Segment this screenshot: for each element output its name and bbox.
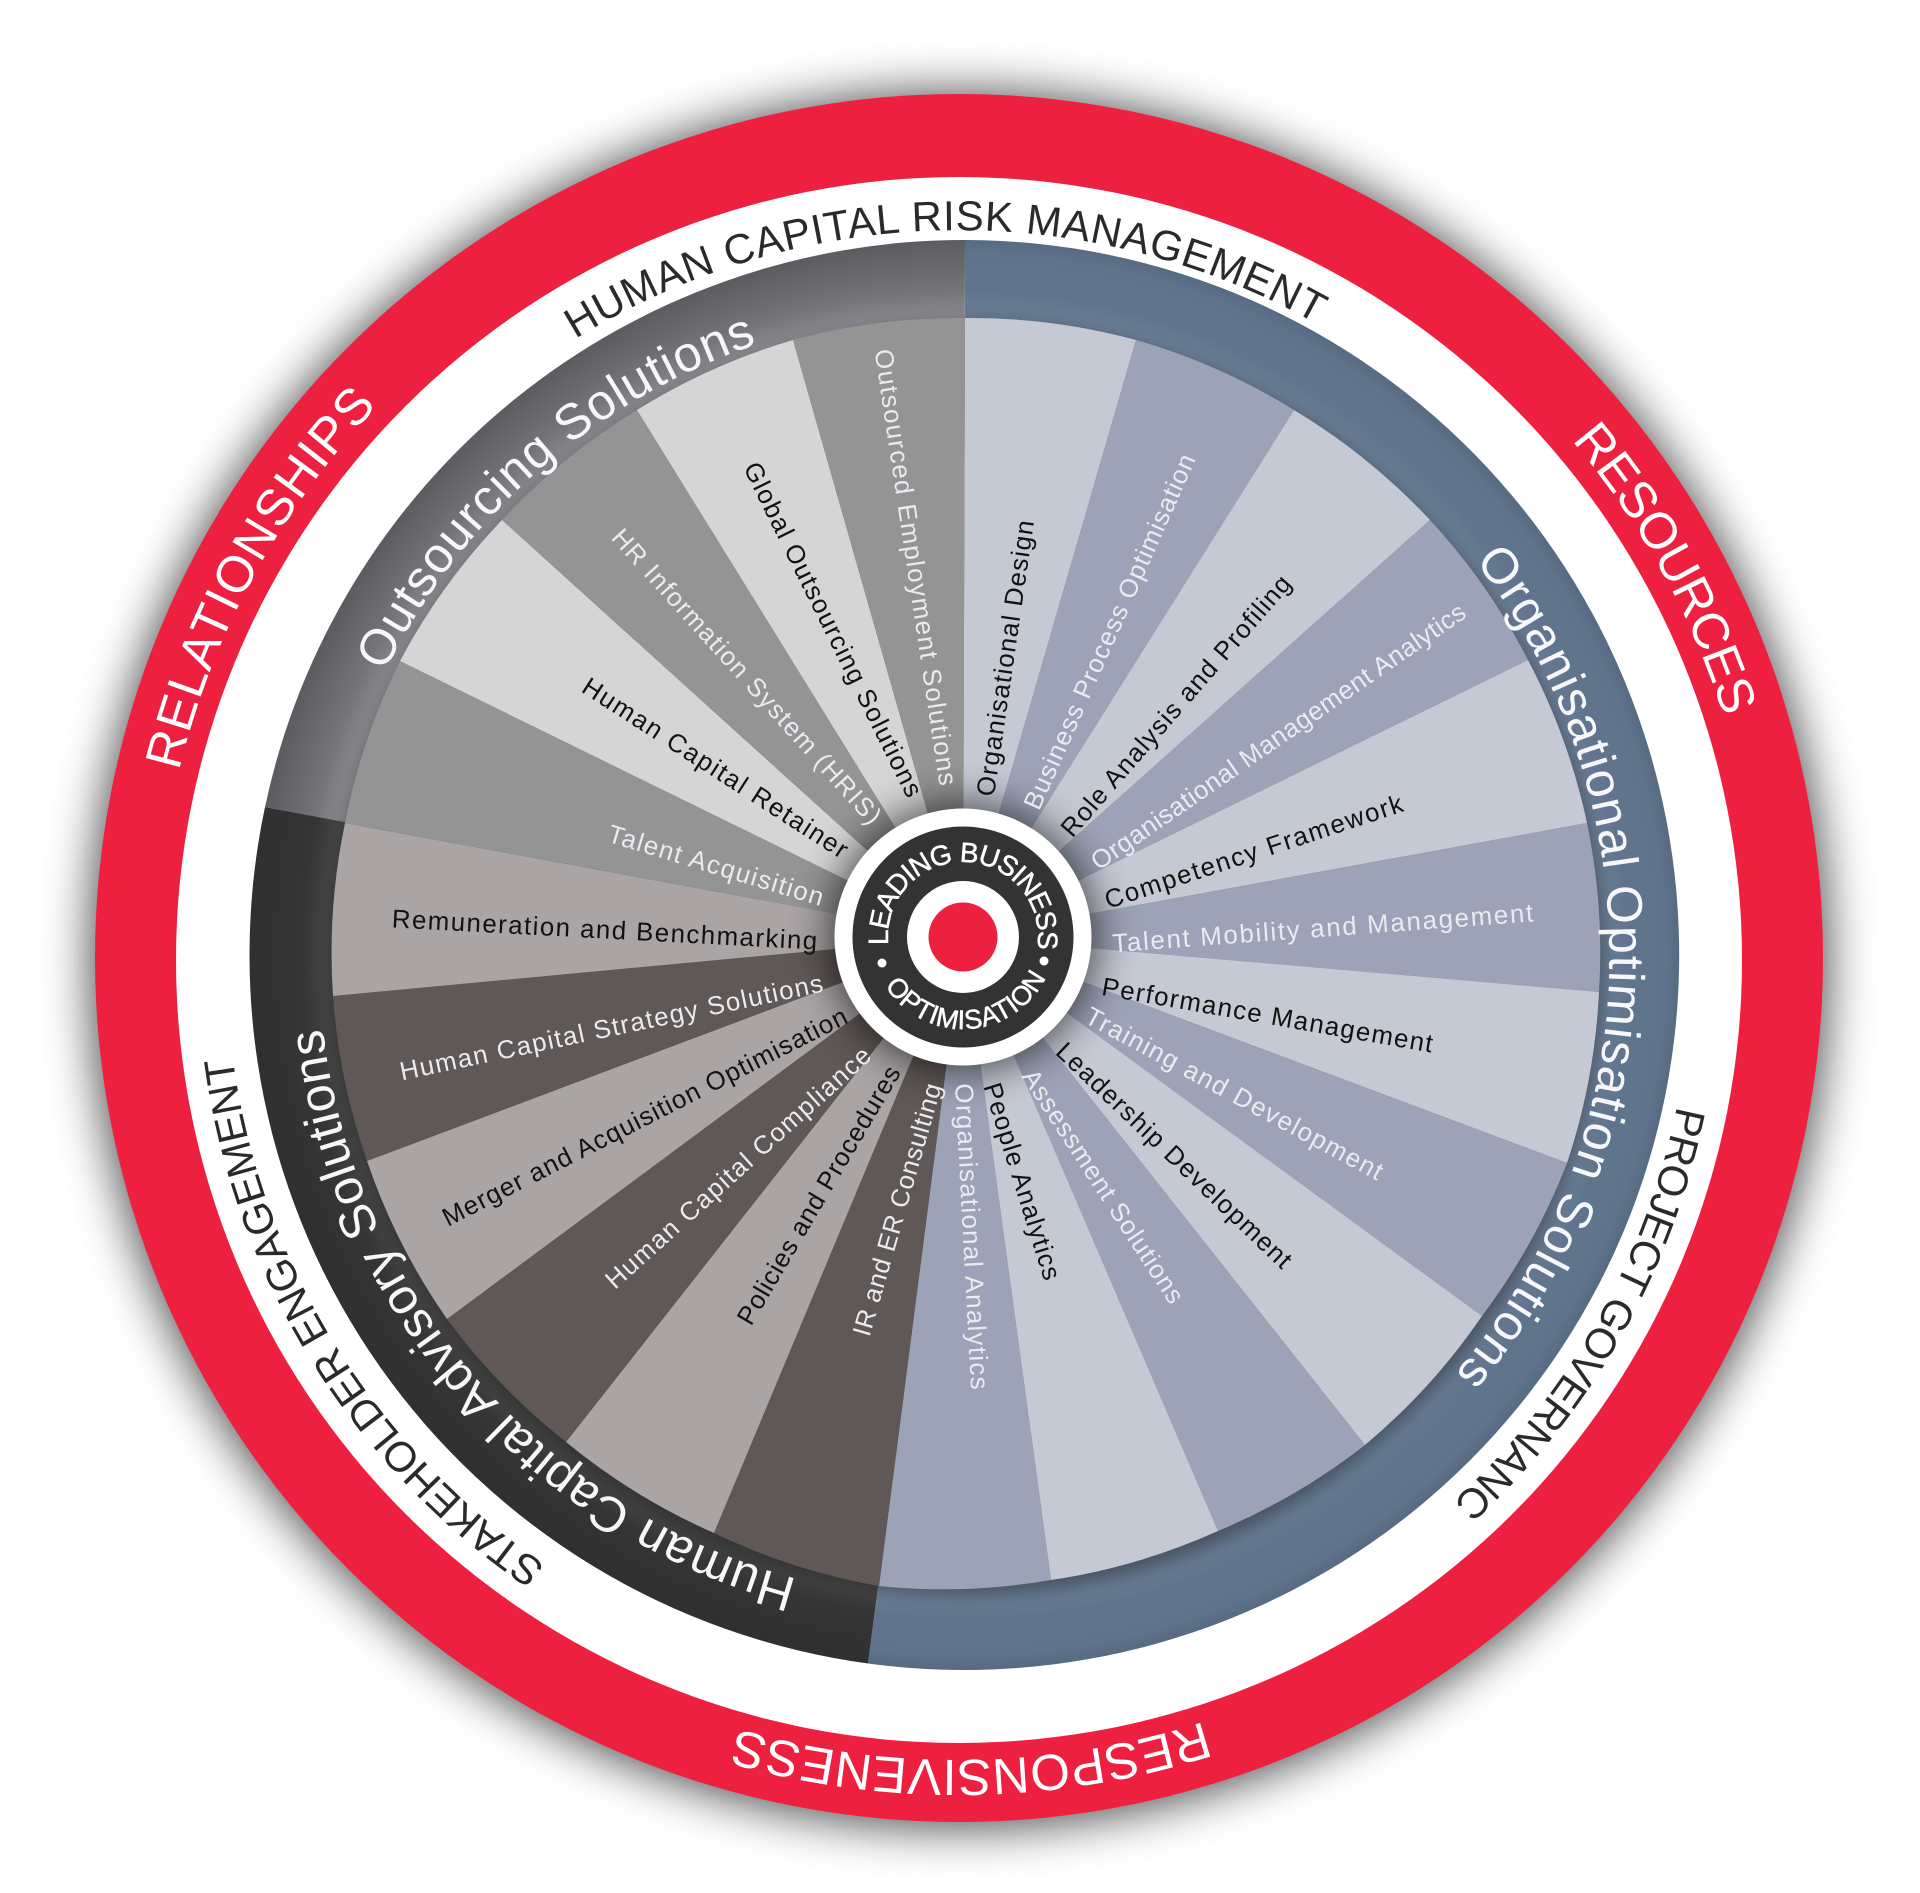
ring label: Human Capital Risk Management: HUMAN CAPITAL RISK MANAGEMENT [564,201,1330,338]
wedge: Organisational Design [963,318,1136,937]
label: Business Process Optimisation: Business Process Optimisation [1019,450,1201,814]
label: Talent Mobility and Management: Talent Mobility and Management [1111,899,1534,958]
ring label: Stakeholder Engagement: STAKEHOLDER ENGAGEMENT [204,1062,542,1584]
wedge: Talent Acquisition [345,661,963,937]
white ring [176,177,1742,1743]
wedge: Organisational Analytics [879,937,1051,1589]
hub text: Optimisation: OPTIMISATION [888,969,1046,1030]
label: Role Analysis and Profiling: Role Analysis and Profiling [1056,570,1297,843]
label: HR Information System (HRIS): HR Information System (HRIS) [606,524,887,830]
label: Merger and Acquisition Optimisation: Merger and Acquisition Optimisation [438,1003,852,1232]
hub text: Leading Business: LEADING BUSINESS [868,842,1058,948]
wedge: Global Outsourcing Solutions [637,340,963,937]
label: IR and ER Consulting: IR and ER Consulting [848,1080,948,1339]
wedge: Human Capital Retainer [400,520,963,937]
wedge: Human Capital Compliance [447,937,963,1442]
band: Organisational Optimisation Solutions [868,240,1679,1670]
wedge: Human Capital Strategy Solutions [333,937,963,1161]
label: Human Capital Retainer: Human Capital Retainer [577,673,853,865]
wedge: Outsourced Employment Solutions [793,318,965,937]
label: Global Outsourcing Solutions: Global Outsourcing Solutions [738,458,927,802]
wheel shadow on band [330,322,1602,1594]
ring label: Responsiveness: RESPONSIVENESS [732,1723,1210,1796]
wedge: Role Analysis and Profiling [963,410,1430,937]
wedge: Business Process Optimisation [963,340,1294,937]
wedge: Assessment Solutions [963,937,1365,1531]
wedge: Organisational Management Analytics [963,520,1528,937]
wheel wedges [332,318,1600,1589]
central hub [834,808,1092,1066]
ring label: Relationships: RELATIONSHIPS [146,388,372,767]
wedge: Remuneration and Benchmarking [332,823,963,996]
wedge: HR Information System [502,410,963,937]
band: Human Capital Advisory Solutions [250,807,963,1664]
label: Competency Framework: Competency Framework [1101,790,1407,915]
hub dot right [1040,956,1048,966]
band title: Outsourcing Solutions: Outsourcing Solutions [360,322,754,664]
wedge: Training and Development [963,937,1567,1316]
label: Assessment Solutions: Assessment Solutions [1016,1064,1189,1309]
label: People Analytics: People Analytics [978,1080,1066,1284]
wedge: Leadership Development [963,937,1482,1445]
wedge labels [391,347,1534,1390]
wedge: Policies and Procedures [566,937,963,1533]
wedge: Performance Management [963,937,1599,1163]
hub dot left [878,958,886,968]
label: Organisational Management Analytics: Organisational Management Analytics [1086,598,1471,876]
label: Organisational Analytics: Organisational Analytics [949,1083,993,1390]
ring label: Project Governance: PROJECT GOVERNANC [1458,1109,1705,1518]
label: Human Capital Compliance: Human Capital Compliance [600,1041,877,1295]
hub shadow [828,802,1098,1072]
ring label: Resources: RESOURCES [1574,421,1754,712]
label: Organisational Design: Organisational Design [972,518,1040,798]
label: Talent Acquisition: Talent Acquisition [605,820,827,912]
label: Training and Development: Training and Development [1080,1002,1388,1186]
label: Remuneration and Benchmarking: Remuneration and Benchmarking [391,905,818,956]
label: Human Capital Strategy Solutions: Human Capital Strategy Solutions [397,970,826,1086]
label: Policies and Procedures: Policies and Procedures [732,1061,907,1330]
label: Performance Management: Performance Management [1100,973,1435,1058]
band title: Human Capital Advisory Solutions: Human Capital Advisory Solutions [298,1031,794,1611]
label: Leadership Development: Leadership Development [1050,1037,1297,1274]
band title: Organisational Optimisation Solutions: Organisational Optimisation Solutions [1459,548,1646,1386]
wedge: Competency Framework [963,660,1587,937]
label: Outsourced Employment Solutions: Outsourced Employment Solutions [869,347,961,787]
band: Outsourcing Solutions [265,240,965,937]
wedge: IR and ER Consulting [714,937,963,1586]
wedge: Talent Mobility and Management [963,823,1600,992]
wedge: People Analytics [963,937,1218,1580]
wedge: Merger and Acquisition Optimisation [367,937,963,1319]
